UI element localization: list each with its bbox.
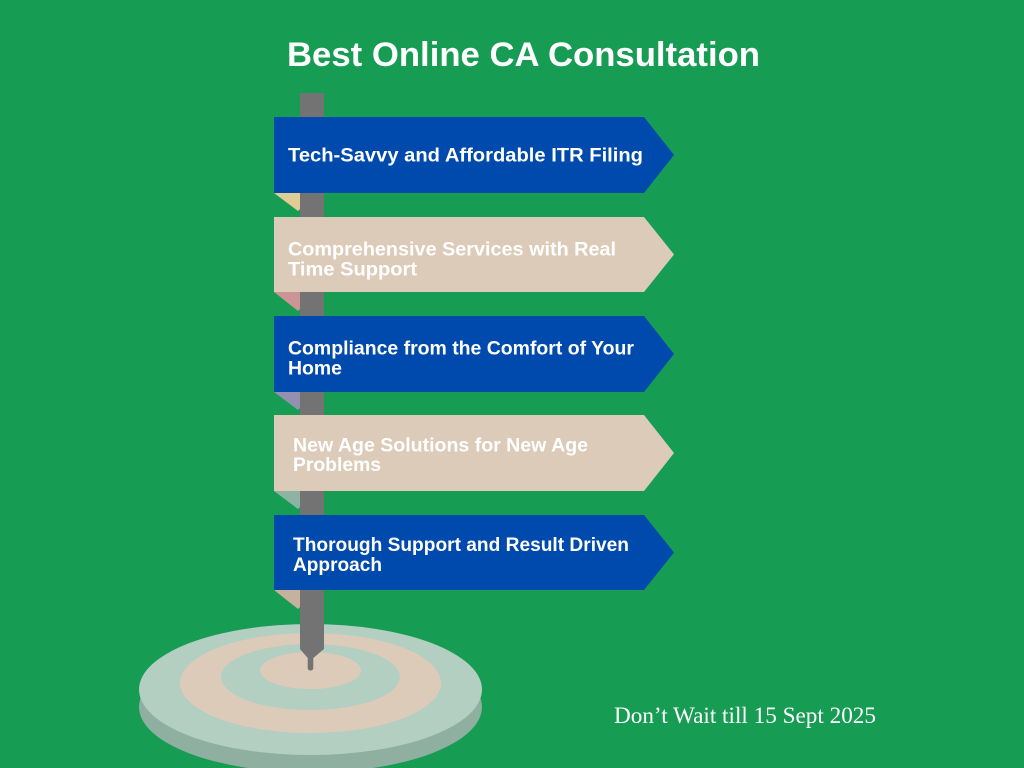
- sign 1: Tech-Savvy: Tech-Savvy and Affordable ITR Filing: [288, 145, 643, 167]
- sign 5: Thorough Support: Approach: [293, 554, 382, 576]
- sign 2: Comprehensive Services: [274, 217, 674, 292]
- sign 4: New Age Solutions: [274, 415, 674, 491]
- signpost pole: [300, 93, 324, 670]
- sign 5: Thorough Support: Thorough Support and Result Driven: [293, 534, 629, 556]
- target base: [139, 624, 482, 768]
- sign 1: Tech-Savvy: [274, 117, 674, 193]
- deadline note: Don’t Wait till 15 Sept 2025: [614, 703, 876, 728]
- sign 5: Thorough Support: [274, 515, 674, 590]
- sign 2: Comprehensive Services: Time Support: [288, 259, 418, 281]
- sign 2: Comprehensive Services: Comprehensive Services with Real: [288, 239, 616, 261]
- sign 4: New Age Solutions: Problems: [293, 454, 381, 476]
- fold: sign 1: [274, 193, 300, 211]
- fold: sign 5: [274, 590, 300, 609]
- sign 4: New Age Solutions: New Age Solutions for New Age: [293, 435, 588, 457]
- fold: sign 2: [274, 292, 300, 311]
- fold: sign 3: [274, 392, 300, 410]
- sign 3: Compliance: Compliance from the Comfort of Your: [288, 338, 634, 360]
- sign 3: Compliance: [274, 316, 674, 392]
- sign 3: Compliance: Home: [288, 358, 342, 380]
- title: Best Online CA Consultation: [287, 36, 760, 74]
- fold: sign 4: [274, 491, 300, 509]
